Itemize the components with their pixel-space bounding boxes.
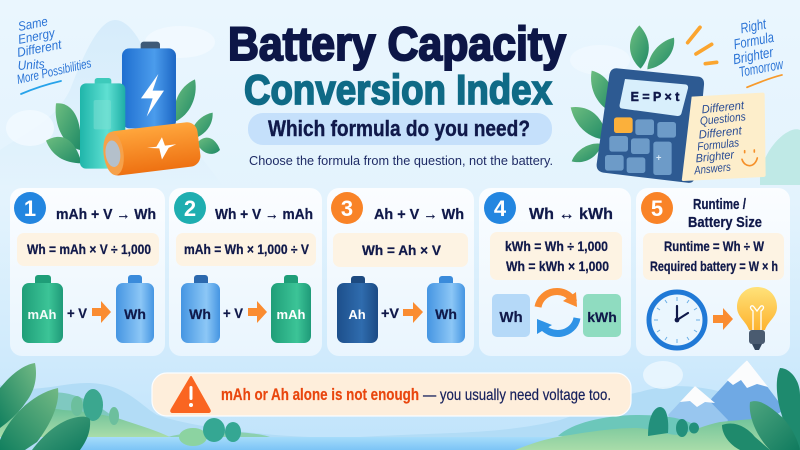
- badge 3: [331, 192, 363, 224]
- panel 4: Wh and kWh: [479, 188, 631, 356]
- icon: calculator: +: [656, 153, 662, 163]
- icon: teal battery: [80, 78, 125, 169]
- icon: smiley: [742, 150, 757, 166]
- icon: orange battery: [101, 121, 202, 177]
- left hill teal backdrop: [40, 392, 115, 425]
- handwritten note left: Energy: [17, 25, 57, 47]
- icon: calculator: [597, 68, 704, 183]
- formula 3: [333, 233, 468, 267]
- formula 2: mAh = Wh × 1,000 ÷ V: [184, 241, 310, 257]
- icon: green battery mAh: mAh: [277, 307, 306, 322]
- formula 2: [176, 233, 316, 266]
- icon: blue battery Wh: [181, 275, 220, 343]
- arrow: [92, 301, 111, 323]
- handwritten note right: Formula: [732, 30, 775, 53]
- note card: [682, 93, 766, 181]
- note card: Formulas: [697, 136, 740, 154]
- badge 1: [14, 192, 46, 224]
- Wh tile: [492, 294, 530, 337]
- right mountains: [643, 360, 785, 435]
- title: [228, 17, 566, 113]
- badge 5: [641, 192, 673, 224]
- heading 5: Runtime /: [693, 196, 747, 213]
- note card: Different: [701, 99, 745, 116]
- formula 4: kWh = Wh ÷ 1,000: [505, 238, 608, 254]
- islet: [168, 418, 270, 446]
- icon: orange spark marks: [688, 27, 717, 64]
- note card: Brighter: [695, 148, 736, 165]
- subtitle pill: Which formula do you need?: [268, 116, 530, 141]
- icon: leaves behind batteries: [46, 79, 220, 163]
- title: Conversion Index: [244, 66, 553, 113]
- formula 1: [17, 233, 159, 266]
- badge 2: [174, 192, 206, 224]
- handwritten note right: Right: [739, 16, 768, 37]
- badge 4: [484, 192, 516, 224]
- icon: light bulb: [737, 287, 777, 350]
- formula 4: Wh = kWh × 1,000: [506, 258, 609, 274]
- illustration: battery group: [46, 42, 220, 177]
- note card: Questions: [699, 110, 747, 128]
- formula 5: [643, 233, 784, 280]
- icon: blue battery Wh: Wh: [124, 306, 146, 322]
- icon: calculator: E = P × t: [631, 90, 680, 104]
- icon: navy battery Ah: [337, 276, 378, 343]
- badge 3: 3: [341, 196, 353, 221]
- right green hills: [558, 415, 710, 436]
- plus V: + V: [67, 305, 88, 321]
- callout text: [221, 385, 611, 404]
- icon: green battery mAh: mAh: [28, 307, 57, 322]
- icon: blue battery: [122, 42, 176, 128]
- icon: cycle arrows: [537, 291, 577, 334]
- landscape: [0, 360, 800, 450]
- title: Battery Capacity: [228, 17, 566, 70]
- Wh tile: Wh: [499, 309, 523, 326]
- handwritten note right: [732, 16, 786, 87]
- heading 1: mAh + V → Wh: [56, 206, 156, 223]
- panel 3: Ah + V to Wh: [327, 188, 474, 356]
- badge 2: 2: [184, 196, 196, 221]
- badge 5: 5: [651, 196, 663, 221]
- plus V: +V: [381, 305, 400, 321]
- icon: green battery mAh: [271, 275, 311, 343]
- handwritten note left: Different: [16, 36, 64, 60]
- heading 5: Battery Size: [688, 214, 762, 231]
- left hill trees: [71, 389, 119, 425]
- heading 5: [688, 196, 762, 231]
- background clouds: [0, 20, 800, 185]
- kWh tile: kWh: [587, 309, 617, 325]
- illustration: calculator and note: [571, 16, 786, 183]
- formula 5: Runtime = Wh ÷ W: [664, 238, 765, 254]
- heading 2: Wh + V → mAh: [215, 206, 313, 223]
- badge 4: 4: [494, 196, 507, 221]
- note card: Different: [698, 124, 743, 142]
- right foreground leaves: [722, 368, 800, 450]
- arrow: [403, 302, 423, 323]
- right trees: [648, 407, 699, 437]
- icon: blue battery Wh: Wh: [435, 306, 457, 322]
- kWh tile: [583, 294, 621, 337]
- tagline: Choose the formula from the question, not the battery.: [249, 153, 553, 168]
- left hill: [0, 409, 170, 437]
- panel 2: Wh + V to mAh: [169, 188, 322, 356]
- heading 4: Wh ↔ kWh: [529, 206, 613, 223]
- callout: [152, 373, 631, 416]
- formula 4: [490, 232, 622, 280]
- icon: leaves behind calculator: [571, 25, 674, 162]
- handwritten note left: Same: [17, 13, 49, 34]
- handwritten note left: More Possibilities: [15, 55, 93, 87]
- icon: warning triangle: [171, 377, 210, 412]
- handwritten note left: [15, 13, 93, 94]
- callout text: mAh or Ah alone is not enough: [221, 385, 419, 404]
- callout text: — you usually need voltage too.: [423, 387, 611, 404]
- arrow: [713, 308, 733, 330]
- formula 3: Wh = Ah × V: [362, 242, 442, 258]
- heading 3: Ah + V → Wh: [374, 206, 464, 223]
- arrow: [248, 301, 267, 323]
- handwritten note left: Units: [17, 56, 46, 73]
- plus V: + V: [223, 305, 244, 321]
- icon: green battery mAh: [22, 275, 63, 343]
- icon: clock: [649, 292, 705, 348]
- badge 1: 1: [24, 196, 36, 221]
- formula 1: Wh = mAh × V ÷ 1,000: [27, 241, 151, 257]
- left foreground leaves: [0, 363, 90, 450]
- handwritten note right: Brighter: [732, 45, 776, 68]
- note card: Answers: [693, 161, 732, 177]
- icon: blue battery Wh: Wh: [189, 306, 211, 322]
- panel 1: mAh + V to Wh: [10, 188, 165, 356]
- panel 5: runtime and battery size: [636, 188, 790, 356]
- icon: blue battery Wh: [427, 276, 465, 343]
- distant blue hills: [0, 383, 800, 450]
- subtitle pill: [248, 113, 552, 145]
- icon: navy battery Ah: Ah: [348, 307, 366, 322]
- icon: blue battery Wh: [116, 275, 154, 343]
- lake: [80, 437, 580, 450]
